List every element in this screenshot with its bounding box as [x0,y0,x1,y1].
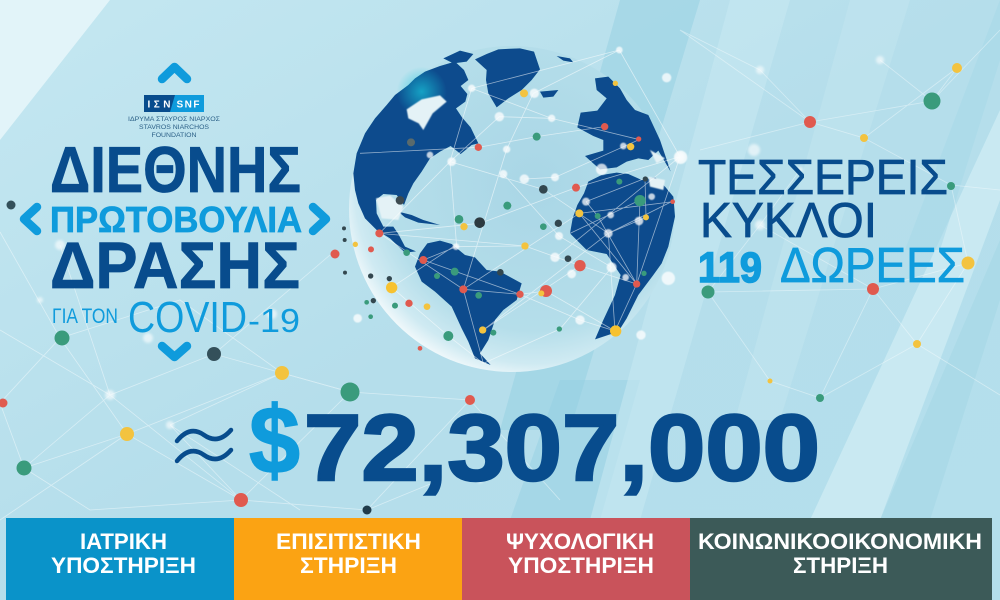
panel: food support: ΣΤΗΡΙΞΗ [300,553,397,578]
icy regions [376,95,665,220]
globe white nodes [353,47,687,340]
amount: dollar sign: $ [249,387,300,494]
amount: value: 72,307,000 [304,395,820,500]
panel: psychological support: ΨΥΧΟΛΟΓΙΚΗ [506,529,654,554]
heading: four rounds: ΚΥΚΛΟΙ [700,194,877,248]
title: first line: ΔΙΕΘΝΗΣ [50,133,301,206]
network lines: left cluster [0,232,560,520]
icon: chevron left [24,207,37,231]
network nodes: white soft [37,56,884,483]
panel: food support: ΕΠΙΣΙΤΙΣΤΙΚΗ [276,529,421,554]
globe network lines [360,50,680,363]
subtitle: -19: -19 [248,302,300,339]
panel: psychological support [462,518,690,600]
panel: socioeconomic support: ΣΤΗΡΙΞΗ [793,553,888,578]
arctic glow [397,67,447,117]
panel: psychological support: ΥΠΟΣΤΗΡΙΞΗ [508,553,654,578]
network lines: right cluster [680,30,1000,398]
panel: food support [234,518,462,600]
logo: foundation [128,95,220,139]
stat: 119: 119 [698,244,762,292]
globe sphere [349,46,675,372]
globe [342,46,687,372]
heading: four rounds: ΤΕΣΣΕΡΕΙΣ [698,151,948,205]
panel: medical support: ΥΠΟΣΤΗΡΙΞΗ [51,553,196,578]
logo: foundation: ΙΔΡΥΜΑ ΣΤΑΥΡΟΣ ΝΙΑΡΧΟΣ [128,116,220,123]
icon: chevron right [313,207,326,231]
icon: approximately sign [177,430,231,461]
heading: four rounds [698,151,948,248]
logo: foundation: FOUNDATION [152,132,197,139]
icon: chevron up [162,67,187,79]
panel: medical support [6,518,234,600]
subtitle: for the: ΓΙΑ ΤΟΝ [52,305,118,328]
title: second line: ΠΡΩΤΟΒΟΥΛΙΑ [50,199,302,240]
stat label: donations: ΔΩΡΕΕΣ [780,239,965,293]
network coloured dots [0,63,974,514]
logo: foundation: SNF [176,100,200,110]
panel: medical support: ΙΑΤΡΙΚΗ [80,529,167,554]
panel: socioeconomic support: ΚΟΙΝΩΝΙΚΟΟΙΚΟΝΟΜΙΚΗ [698,529,982,554]
logo: foundation: ΙΣΝ [148,100,170,110]
subtitle: COVID: COVID [128,293,247,342]
title: third line: ΔΡΑΣΗΣ [50,228,300,302]
logo: foundation: STAVROS NIARCHOS [139,124,210,131]
continents [353,48,675,365]
icon: chevron down [162,346,187,357]
globe coloured nodes [342,81,675,351]
panel: socioeconomic support [690,518,992,600]
